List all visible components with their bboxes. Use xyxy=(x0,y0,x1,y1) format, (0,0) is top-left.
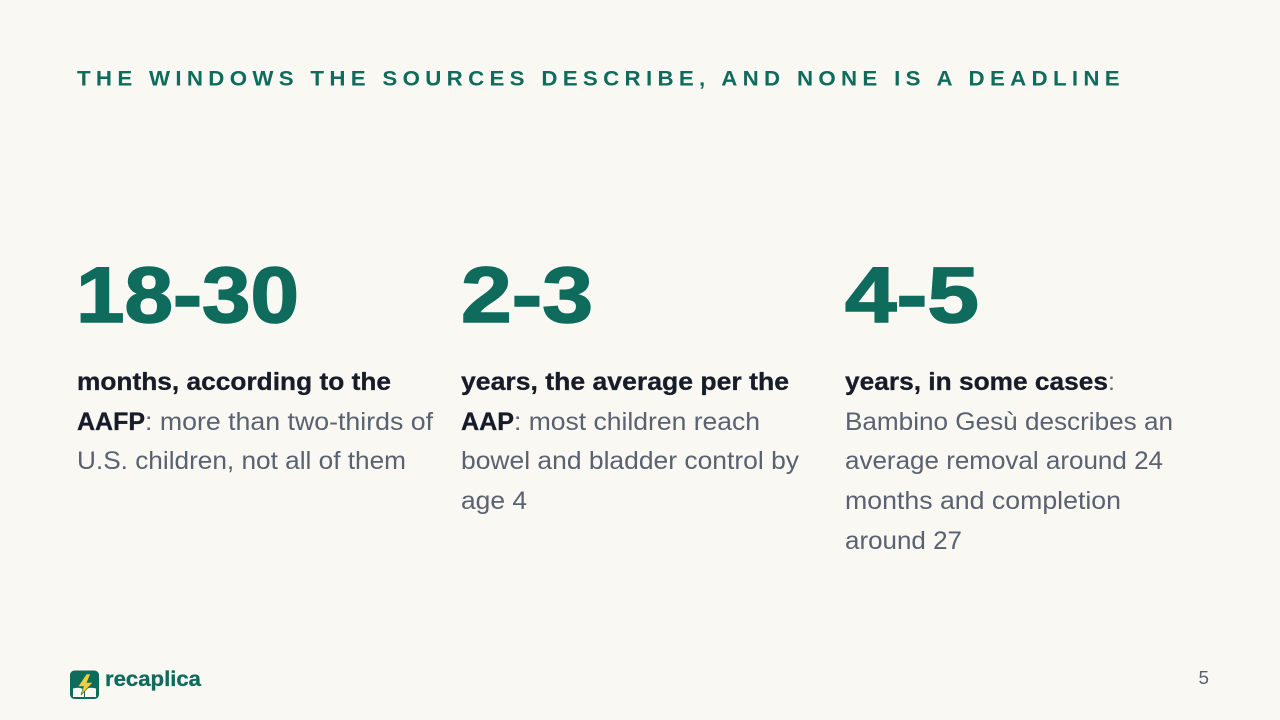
description: AAFP window: : more than two-thirds of xyxy=(145,408,433,436)
panel: 4-5 years xyxy=(845,250,1173,555)
description: AAP window: AAP xyxy=(461,408,514,436)
description: AAP window xyxy=(461,368,800,515)
stat: 4-5: 4-5 xyxy=(845,250,979,339)
description: AAFP window: months, according to the xyxy=(77,368,391,396)
description: AAFP window xyxy=(77,368,433,475)
wordmark: recaplica xyxy=(105,668,201,691)
description: Bambino Gesù window: months and completion xyxy=(845,487,1121,515)
icon: lightning bolt over open book xyxy=(70,670,99,699)
description: Bambino Gesù window: average removal around 24 xyxy=(845,447,1163,475)
description: Bambino Gesù window: : xyxy=(1108,368,1115,396)
page number: 5 xyxy=(1198,668,1209,688)
description: AAFP window: AAFP xyxy=(77,408,145,436)
stat: 18-30: 18-30 xyxy=(76,250,299,339)
logo: recaplica xyxy=(70,668,201,699)
description: Bambino Gesù window: years, in some cases xyxy=(845,368,1108,396)
panel: 2-3 years xyxy=(461,250,800,515)
description: AAP window: age 4 xyxy=(461,487,527,515)
description: Bambino Gesù window xyxy=(845,368,1173,555)
description: Bambino Gesù window: around 27 xyxy=(845,527,962,555)
title: THE WINDOWS THE SOURCES DESCRIBE, AND NONE IS A DEADLINE xyxy=(77,68,1125,90)
description: AAP window: bowel and bladder control by xyxy=(461,447,800,475)
panel: 18-30 months xyxy=(76,250,433,475)
description: AAP window: : most children reach xyxy=(514,408,760,436)
description: Bambino Gesù window: Bambino Gesù describes an xyxy=(845,408,1173,436)
description: AAFP window: U.S. children, not all of them xyxy=(77,447,406,475)
description: AAP window: years, the average per the xyxy=(461,368,789,396)
stat: 2-3: 2-3 xyxy=(461,250,593,339)
